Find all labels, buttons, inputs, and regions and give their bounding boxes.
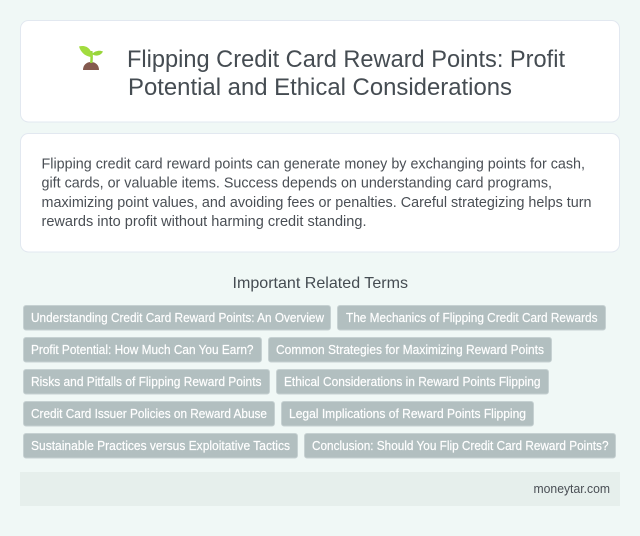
- title: Potential and Ethical Considerations: [128, 74, 512, 101]
- tag: Profit Potential: How Much Can You Earn?: [31, 343, 254, 357]
- panel: summary card: [20, 134, 620, 252]
- summary text: maximizing point values, and avoiding fees or penalties. Careful strategizing helps turn: [42, 195, 592, 211]
- tag: [24, 370, 270, 394]
- tag: Risks and Pitfalls of Flipping Reward Points: [31, 375, 262, 389]
- title: [127, 46, 565, 101]
- tag: Sustainable Practices versus Exploitative Tactics: [31, 439, 290, 453]
- summary text: gift cards, or valuable items. Success depends on understanding card programs,: [42, 176, 552, 192]
- tag: Ethical Considerations in Reward Points Flipping: [284, 375, 541, 389]
- footer bar: [20, 472, 620, 506]
- tag: Credit Card Issuer Policies on Reward Abuse: [31, 407, 267, 421]
- tag: [24, 402, 274, 426]
- related terms tags: [24, 306, 616, 458]
- heading: important related terms: Important Related Terms: [232, 275, 408, 292]
- tag: [24, 434, 298, 458]
- tag: [24, 338, 262, 362]
- summary text: Flipping credit card reward points can generate money by exchanging points for cash,: [42, 156, 585, 172]
- icon: seedling: [79, 46, 103, 70]
- tag: [282, 402, 534, 426]
- tag: [276, 370, 548, 394]
- summary text: rewards into profit without harming credit standing.: [42, 214, 366, 230]
- tag: [268, 338, 552, 362]
- panel: header card: [20, 20, 620, 122]
- tag: The Mechanics of Flipping Credit Card Rewards: [346, 311, 598, 325]
- tag: Common Strategies for Maximizing Reward Points: [276, 343, 544, 357]
- tag: [338, 306, 606, 330]
- tag: Legal Implications of Reward Points Flipping: [289, 407, 526, 421]
- tag: [24, 306, 330, 330]
- footer source text: moneytar.com: [534, 482, 610, 496]
- tag: Understanding Credit Card Reward Points: An Overview: [31, 311, 325, 325]
- title: Flipping Credit Card Reward Points: Profit: [127, 46, 565, 73]
- tag: Conclusion: Should You Flip Credit Card Reward Points?: [312, 439, 609, 453]
- summary text: [42, 156, 592, 230]
- tag: [304, 434, 616, 458]
